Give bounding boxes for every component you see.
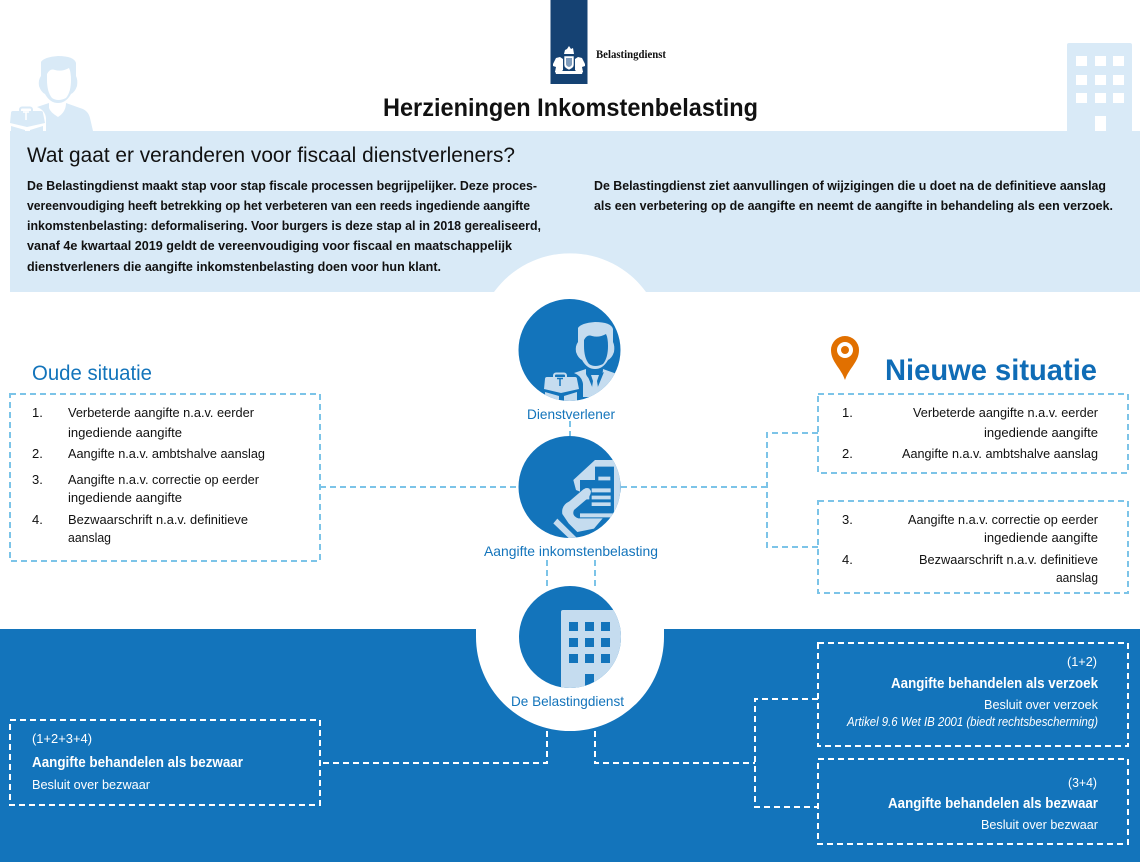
panel: old situation list: 2. [32, 446, 43, 461]
panel: lower blue band [0, 629, 1140, 862]
panel: outcome new situation request: (1+2) [1067, 654, 1097, 669]
icon: location pin [831, 336, 859, 380]
panel: new situation items 1 and 2: ingediende aangifte [984, 425, 1098, 440]
panel: old situation list: 3. [32, 472, 43, 487]
text block: introduction left: vanaf 4e kwartaal 2019 geldt de vereenvoudiging voor fiscaal en maatschappelijk [27, 238, 513, 253]
panel: new situation items 1 and 2: 2. [842, 446, 853, 461]
panel: old situation list: Bezwaarschrift n.a.v. definitieve [68, 512, 248, 527]
panel: new situation items 3 and 4: ingediende aangifte [984, 530, 1098, 545]
heading: old situation: Oude situatie [32, 362, 152, 385]
text block: introduction left: dienstverleners die aangifte inkomstenbelasting doen voor hun klant. [27, 259, 441, 274]
icon: tax return document circle [518, 436, 620, 539]
panel: outcome new situation objection: Aangifte behandelen als bezwaar [888, 795, 1098, 812]
panel: new situation items 1 and 2: Verbeterde aangifte n.a.v. eerder [913, 405, 1099, 420]
text block: introduction left: De Belastingdienst maakt stap voor stap fiscale processen begrijpelijker. Deze proces- [27, 178, 537, 193]
label: income tax return: Aangifte inkomstenbelasting [484, 543, 658, 559]
panel: old situation list: Aangifte n.a.v. correctie op eerder [68, 472, 260, 487]
panel: outcome new situation objection: (3+4) [1068, 775, 1097, 790]
panel: new situation items 1 and 2: 1. [842, 405, 853, 420]
text block: introduction left: vereenvoudiging heeft betrekking op het verbeteren van een reeds ingediende aangifte [27, 198, 530, 213]
panel: outcome new situation objection [818, 759, 1128, 844]
panel: outcome new situation request [818, 643, 1128, 746]
panel: old situation list [10, 394, 320, 561]
panel: outcome new situation request: Besluit over verzoek [984, 697, 1098, 712]
panel: outcome old situation: Aangifte behandelen als bezwaar [32, 754, 243, 771]
panel: old situation list: ingediende aangifte [68, 425, 182, 440]
panel: new situation items 3 and 4: 4. [842, 552, 853, 567]
label: service provider: Dienstverlener [527, 406, 615, 422]
panel: outcome new situation objection: Besluit over bezwaar [981, 817, 1099, 832]
panel: new situation items 1 and 2: Aangifte n.a.v. ambtshalve aanslag [902, 446, 1098, 461]
title: Herzieningen Inkomstenbelasting [383, 94, 758, 122]
icon: tax office circle [519, 586, 625, 690]
panel: old situation list: ingediende aangifte [68, 490, 182, 505]
panel: old situation list: Verbeterde aangifte n.a.v. eerder [68, 405, 255, 420]
panel: outcome new situation request: Aangifte behandelen als verzoek [891, 675, 1099, 692]
heading: new situation: Nieuwe situatie [885, 354, 1097, 387]
panel: new situation items 3 and 4: Aangifte n.a.v. correctie op eerder [908, 512, 1099, 527]
panel: new situation items 3 and 4: aanslag [1056, 570, 1098, 585]
panel: outcome new situation request: Artikel 9.6 Wet IB 2001 (biedt rechtsbescherming) [846, 714, 1098, 729]
connectors: old and new situation [320, 421, 818, 586]
panel: outcome old situation: (1+2+3+4) [32, 731, 92, 746]
logo: Belastingdienst [550, 0, 666, 84]
text block: introduction right: De Belastingdienst ziet aanvullingen of wijzigingen die u doet na de definitieve aanslag [594, 178, 1106, 193]
panel: old situation list: 4. [32, 512, 43, 527]
panel: old situation list: 1. [32, 405, 43, 420]
text block: introduction left: inkomstenbelasting: deformalisering. Voor burgers is deze stap al in 2018 gerealiseerd, [27, 218, 541, 233]
panel: new situation items 3 and 4: 3. [842, 512, 853, 527]
text block: introduction left [27, 178, 541, 274]
panel: old situation list: Aangifte n.a.v. ambtshalve aanslag [68, 446, 265, 461]
panel: outcome old situation [10, 720, 320, 805]
panel: new situation items 3 and 4 [818, 501, 1128, 593]
panel: outcome old situation: Besluit over bezwaar [32, 777, 151, 792]
icon: adviser silhouette [10, 56, 93, 131]
heading: intro question: Wat gaat er veranderen voor fiscaal dienstverleners? [27, 144, 515, 167]
panel: new situation items 3 and 4: Bezwaarschrift n.a.v. definitieve [919, 552, 1098, 567]
panel: introduction background [10, 131, 1140, 292]
icon: service provider circle [518, 299, 630, 402]
logo wordmark: Belastingdienst [596, 49, 666, 61]
label: tax office: De Belastingdienst [511, 693, 624, 709]
icon: office building silhouette [1067, 43, 1132, 131]
panel: old situation list: aanslag [68, 530, 111, 545]
text block: introduction right: als een verbetering op de aangifte en neemt de aangifte in behandeling als een verzoek. [594, 198, 1113, 213]
connectors: treatment outcomes [320, 699, 818, 807]
text block: introduction right [594, 178, 1113, 213]
panel: new situation items 1 and 2 [818, 394, 1128, 473]
